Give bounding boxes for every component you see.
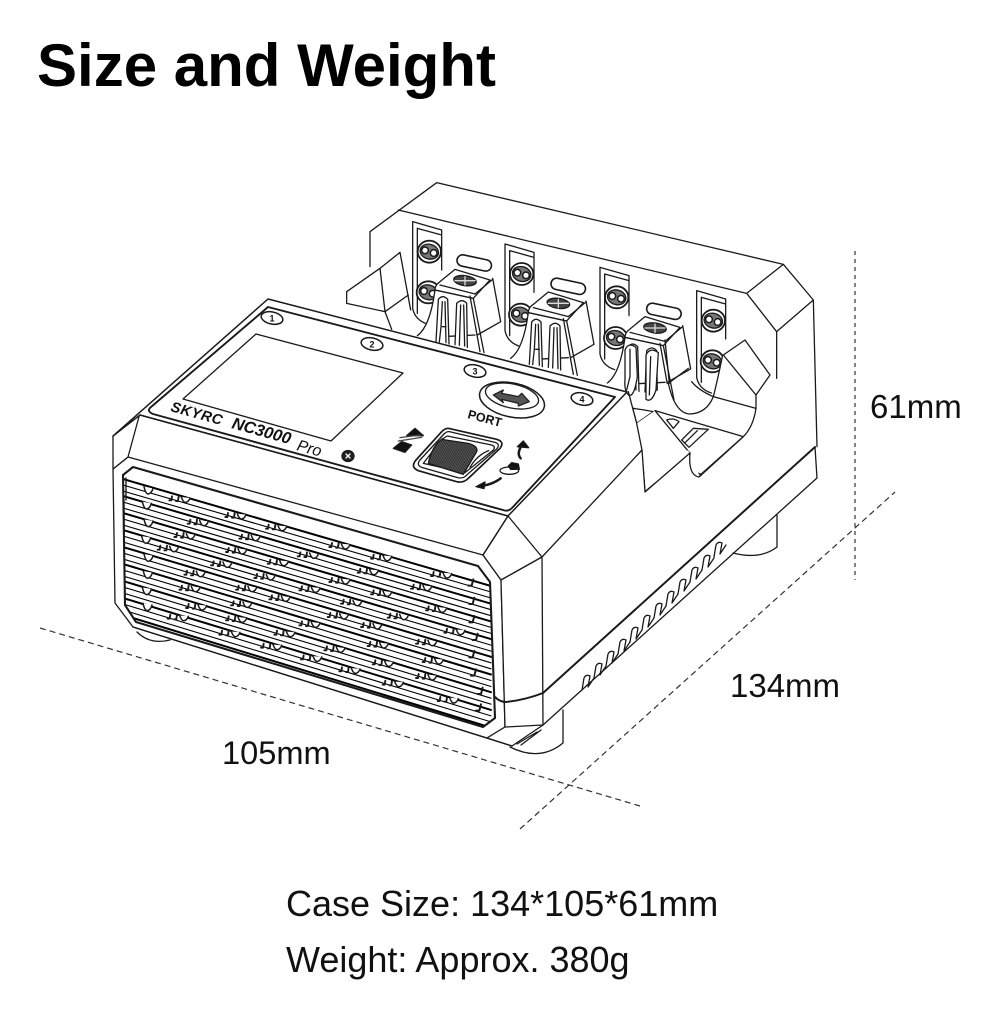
charging slot 2 xyxy=(550,277,587,295)
charging slot 1 xyxy=(456,254,493,272)
bay number 3 xyxy=(463,363,487,379)
model suffix: Pro xyxy=(295,437,324,461)
control panel face xyxy=(149,307,615,511)
scroll wheel xyxy=(413,428,502,482)
case size text: Case Size: 134*105*61mm xyxy=(286,883,718,924)
port label: PORT xyxy=(466,407,504,430)
weight text: Weight: Approx. 380g xyxy=(286,939,630,980)
rear foot xyxy=(733,515,777,555)
corner facets xyxy=(483,516,542,580)
side panel xyxy=(542,437,817,725)
battery terminal 1 xyxy=(413,222,442,324)
model name: NC3000 xyxy=(230,415,294,448)
front left chamfer xyxy=(113,413,140,469)
clip 1 xyxy=(417,269,501,353)
icon: rotate arrows xyxy=(476,441,529,489)
charging slot 3 xyxy=(646,302,682,320)
width dimension line xyxy=(40,628,640,806)
bay number 1 xyxy=(260,310,284,326)
rear housing xyxy=(340,183,817,537)
icon: bluetooth xyxy=(342,450,354,462)
bay number 4: 4 xyxy=(579,394,585,404)
depth dimension line xyxy=(520,492,895,829)
vent slots xyxy=(582,542,726,690)
clip 2 xyxy=(511,292,594,376)
port button xyxy=(476,377,548,423)
width label: 105mm xyxy=(222,734,331,771)
title: Size and Weight xyxy=(37,32,496,99)
bay number 2: 2 xyxy=(369,340,375,350)
height dimension line xyxy=(854,251,856,580)
front foot xyxy=(510,710,563,754)
brand logo: SKYRC xyxy=(169,399,225,429)
icon: mode triangle and square xyxy=(393,428,423,452)
front corner pillar xyxy=(487,557,543,746)
front face xyxy=(113,457,505,738)
right well and wedges xyxy=(625,340,770,492)
clip 3 xyxy=(607,317,691,401)
lcd screen xyxy=(183,334,403,441)
battery terminal 3 xyxy=(600,267,629,370)
charger illustration xyxy=(113,183,817,754)
battery terminal 2 xyxy=(505,244,534,346)
top control plate xyxy=(113,299,627,516)
ventilation grille xyxy=(123,467,495,728)
bay number 1: 1 xyxy=(269,314,275,324)
bay number 3: 3 xyxy=(472,366,478,376)
height label: 61mm xyxy=(870,388,962,425)
battery terminal 4 xyxy=(697,291,726,393)
depth label: 134mm xyxy=(730,667,840,704)
bay number 4 xyxy=(570,391,594,407)
icon: port arrow xyxy=(493,390,529,406)
left wedge xyxy=(347,252,412,328)
bay number 2 xyxy=(360,336,384,352)
